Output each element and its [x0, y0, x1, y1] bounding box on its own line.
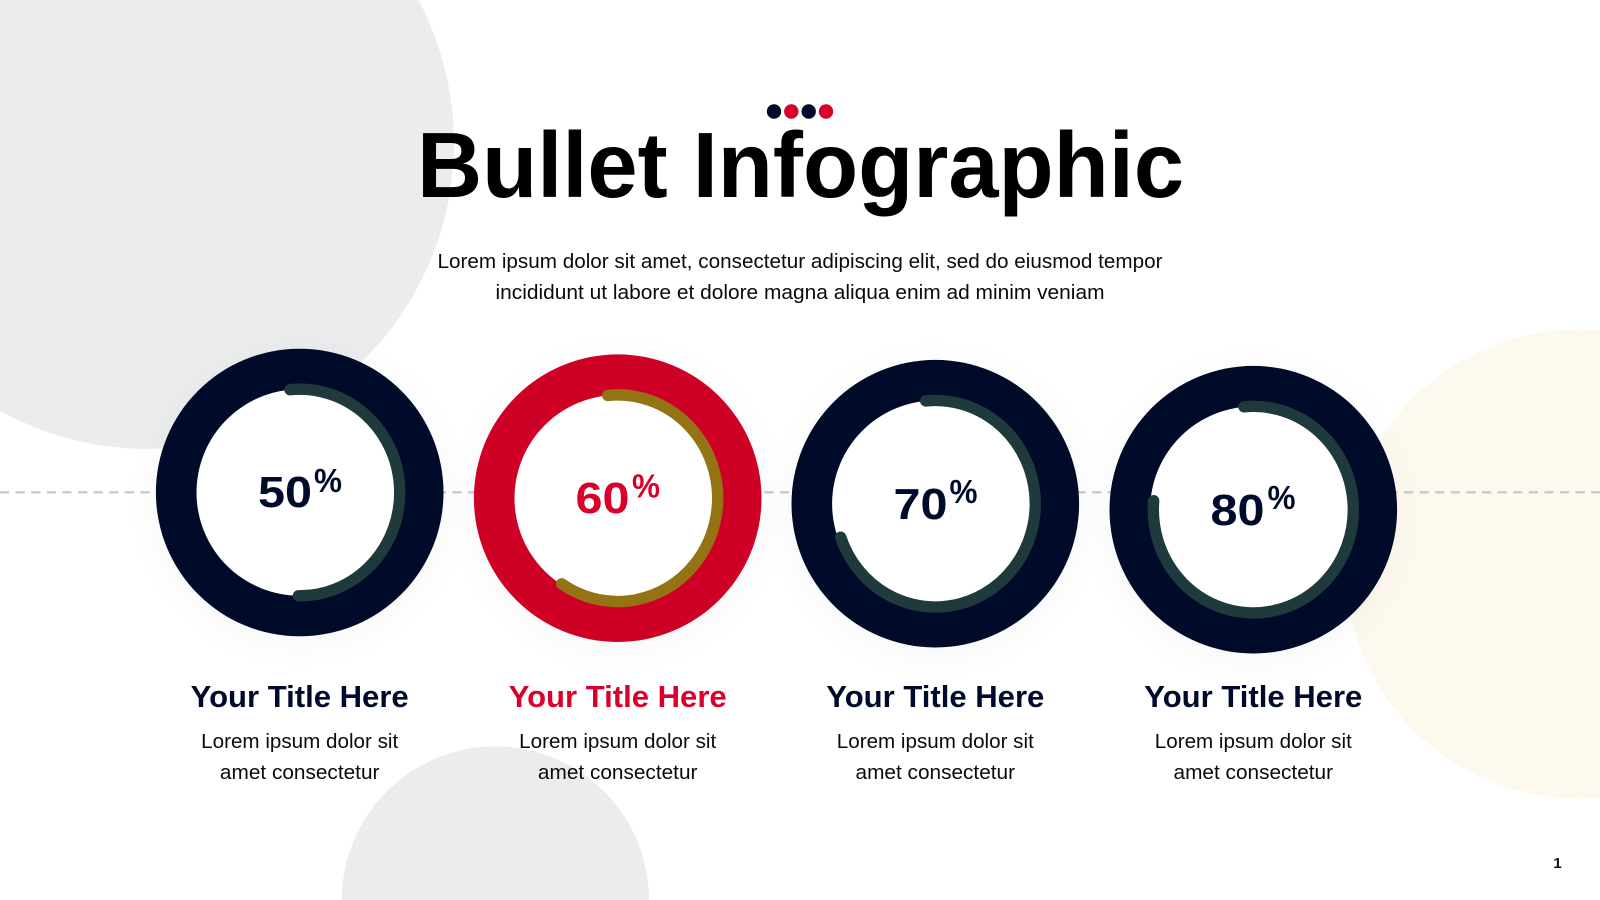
subtitle text — [438, 250, 1163, 304]
value 50: 50 — [258, 468, 312, 517]
value 60: 60 — [576, 474, 630, 523]
percent sign 70: % — [950, 473, 978, 510]
panel: 60 percent — [474, 354, 762, 784]
progress arc 80 — [1153, 406, 1353, 613]
description 60: amet consectetur — [538, 761, 698, 784]
title: Bullet Infographic — [417, 113, 1184, 217]
heading 70: Your Title Here — [826, 679, 1044, 714]
panel: 80 percent — [1110, 366, 1397, 784]
page number: 1 — [1553, 855, 1562, 872]
description 70 — [837, 730, 1034, 784]
heading 50: Your Title Here — [191, 679, 409, 714]
subtitle text: incididunt ut labore et dolore magna aliqua enim ad minim veniam — [496, 281, 1104, 304]
description 60: Lorem ipsum dolor sit — [519, 730, 716, 753]
description 50 — [201, 730, 398, 784]
panel: 70 percent — [792, 360, 1079, 784]
progress arc 50 — [290, 389, 400, 596]
percent sign 80: % — [1268, 479, 1296, 516]
panel: 50 percent — [156, 349, 443, 784]
description 80: Lorem ipsum dolor sit — [1155, 730, 1352, 753]
description 80 — [1155, 730, 1352, 784]
background circle: gray bottom — [342, 746, 649, 900]
decorative dots above title — [767, 104, 833, 119]
donut ring 80 — [1110, 366, 1397, 654]
donut ring 60 — [474, 354, 762, 642]
description 70: Lorem ipsum dolor sit — [837, 730, 1034, 753]
description 60 — [519, 730, 716, 784]
background circle: large gray top left — [0, 0, 454, 449]
donut ring 50 — [156, 349, 443, 636]
progress arc 60 — [562, 395, 718, 601]
value 80: 80 — [1210, 486, 1264, 535]
donut ring 70 — [792, 360, 1079, 648]
description 70: amet consectetur — [856, 761, 1015, 784]
percent sign 50: % — [314, 462, 342, 499]
progress arc 70 — [841, 400, 1035, 607]
description 80: amet consectetur — [1174, 761, 1333, 784]
description 50: amet consectetur — [220, 761, 380, 784]
description 50: Lorem ipsum dolor sit — [201, 730, 398, 753]
percent sign 60: % — [632, 468, 660, 504]
subtitle text: Lorem ipsum dolor sit amet, consectetur adipiscing elit, sed do eiusmod tempor — [438, 250, 1163, 273]
background circle: cream right — [1344, 329, 1600, 799]
heading 80: Your Title Here — [1144, 679, 1362, 714]
value 70: 70 — [894, 480, 948, 529]
heading 60: Your Title Here — [509, 679, 727, 714]
